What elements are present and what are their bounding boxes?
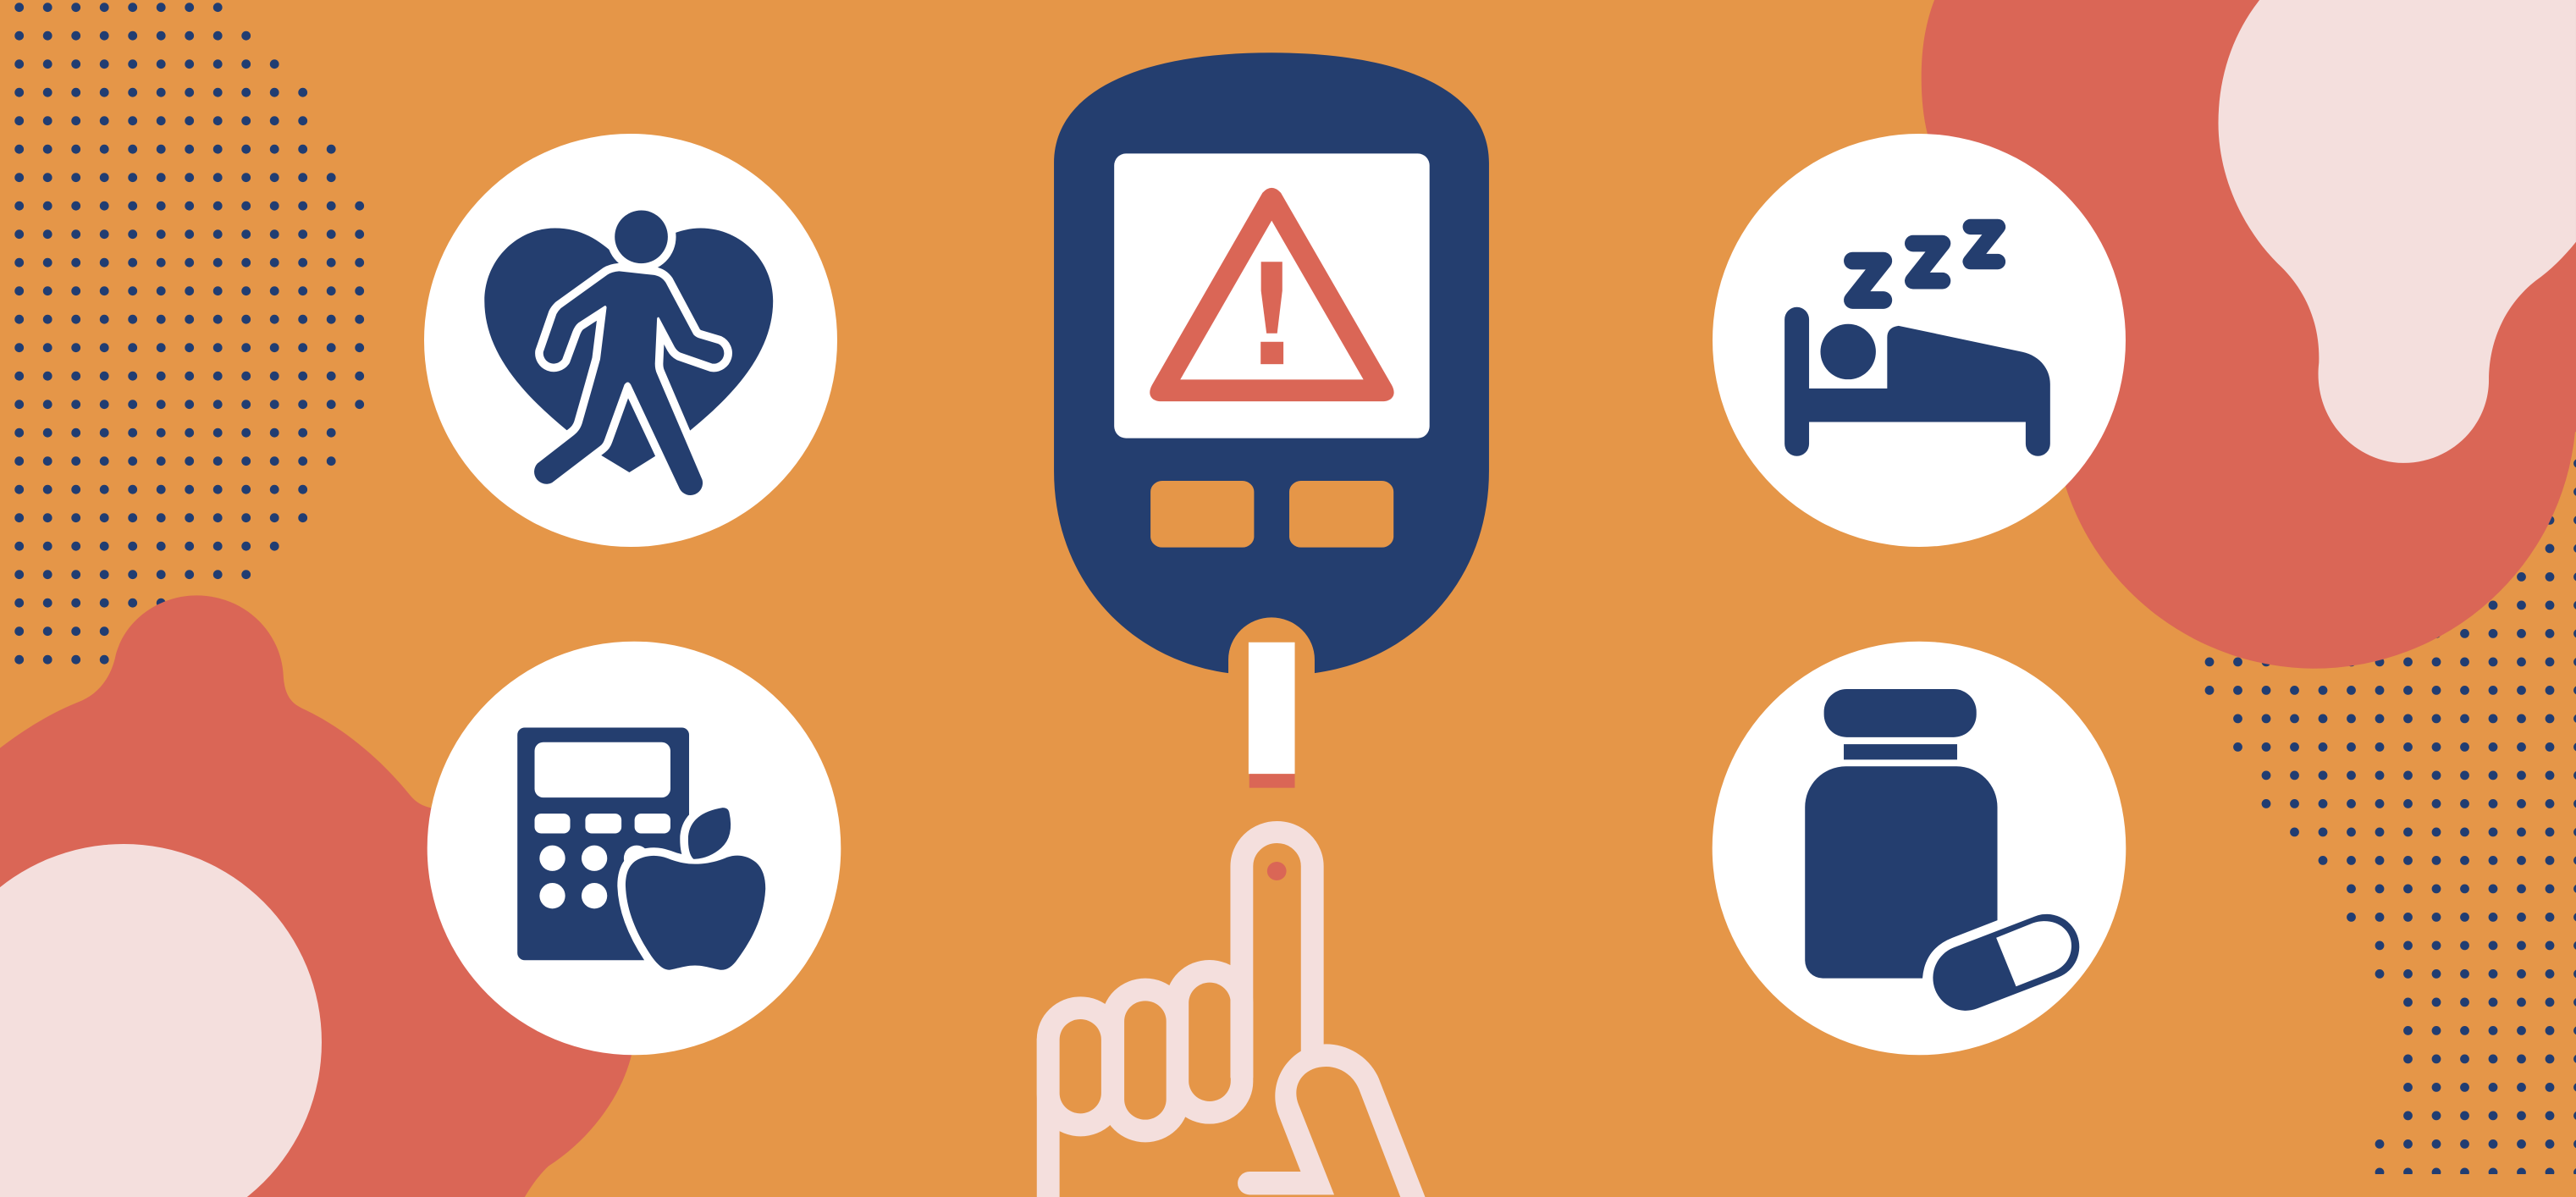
exclamation mark bbox=[1260, 262, 1283, 364]
white circle: exercise bbox=[424, 134, 837, 547]
dot pattern: top left bbox=[19, 8, 361, 659]
panel: sleep bbox=[1713, 134, 2126, 547]
glucose meter bbox=[1054, 52, 1489, 788]
letter z small bbox=[1963, 219, 2005, 269]
white circle: sleep bbox=[1713, 134, 2126, 547]
right meter button bbox=[1289, 481, 1393, 548]
folded fingers bbox=[1037, 960, 1253, 1197]
icon: person sleeping in bed bbox=[1784, 219, 2050, 456]
coral blob: top right bbox=[1922, 0, 2576, 669]
calculator body bbox=[517, 727, 689, 960]
finger openings bbox=[1060, 983, 1231, 1120]
white circle: diet bbox=[427, 642, 841, 1055]
letter z medium bbox=[1905, 235, 1950, 290]
hand with raised finger bbox=[1037, 832, 1426, 1197]
left meter button bbox=[1150, 481, 1254, 548]
panel: exercise and heart health bbox=[424, 134, 837, 547]
icon: calculator and apple bbox=[517, 727, 765, 970]
calculator screen bbox=[535, 742, 670, 797]
blood drop bbox=[1267, 862, 1287, 880]
white circle: medication bbox=[1713, 642, 2126, 1055]
bottle cap bbox=[1824, 689, 1977, 737]
apple bbox=[626, 808, 765, 970]
capsule light half bbox=[1996, 921, 2071, 986]
bed and blanket bbox=[1784, 307, 2050, 456]
icon: walking person over heart bbox=[484, 210, 773, 495]
panel: medication bbox=[1713, 642, 2126, 1055]
head bbox=[615, 210, 668, 263]
dot pattern: lower right bbox=[2209, 463, 2576, 1172]
capsule bbox=[1966, 946, 2047, 978]
calculator keys bbox=[535, 814, 670, 908]
pale blob: top right bbox=[2218, 0, 2576, 463]
apple halo bbox=[626, 808, 765, 970]
test strip tip bbox=[1249, 774, 1295, 788]
letter z large bbox=[1844, 252, 1892, 309]
icon: pill bottle and capsule bbox=[1805, 689, 2071, 986]
meter screen bbox=[1114, 153, 1430, 439]
pale circle: bottom left bbox=[0, 844, 322, 1197]
bottle body bbox=[1805, 766, 1998, 979]
meter body bbox=[1054, 52, 1489, 673]
test strip bbox=[1249, 643, 1295, 774]
heart bbox=[484, 228, 773, 472]
coral blob: bottom left bbox=[0, 595, 632, 1197]
thumb bbox=[1238, 1044, 1426, 1197]
sleeper head bbox=[1820, 324, 1876, 379]
bottle neck bbox=[1844, 744, 1957, 759]
panel: diet and carb counting bbox=[427, 642, 841, 1055]
warning triangle bbox=[1150, 188, 1394, 401]
person outline bbox=[534, 271, 724, 495]
index finger bbox=[1242, 832, 1312, 1078]
